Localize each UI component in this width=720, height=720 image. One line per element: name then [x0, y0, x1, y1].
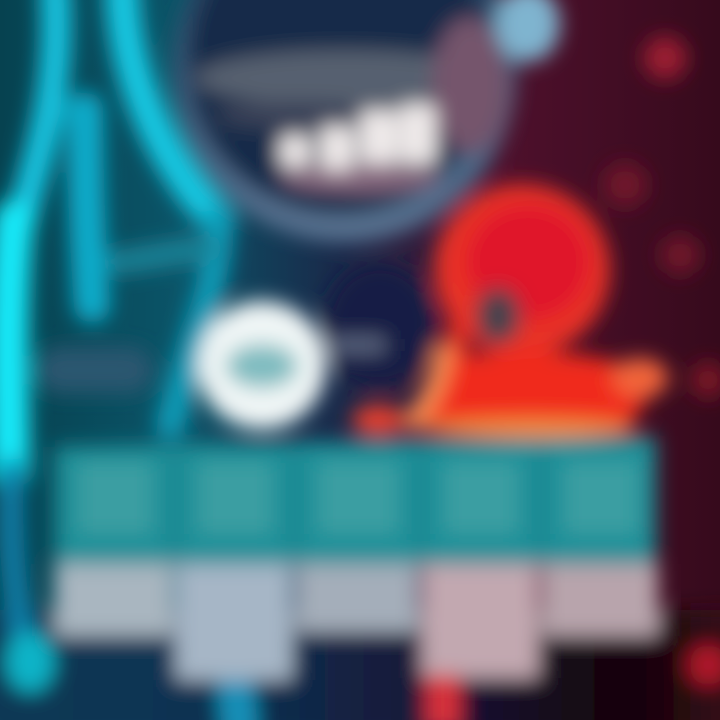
- artery orange highlight left: [410, 345, 445, 425]
- illustration: bottom red strip: [426, 675, 460, 720]
- bottom dark band: [0, 610, 720, 720]
- artery opening: [476, 288, 520, 344]
- illustration: cyan blood vessels: [8, 0, 240, 720]
- gum: [280, 164, 440, 192]
- icon: lower cyan highlight: [6, 632, 54, 692]
- column separators: [172, 438, 543, 564]
- artery stem: [400, 310, 660, 432]
- lips: [432, 17, 508, 153]
- upper palate shadow: [215, 101, 385, 129]
- artery tip: [612, 358, 668, 398]
- cell text shading: [78, 462, 638, 534]
- reflection top right: [496, 0, 560, 62]
- teal panel base: [55, 436, 656, 566]
- illustration: open mouth: [173, 0, 560, 242]
- badge centre: [226, 344, 298, 388]
- artery outer wall: [434, 184, 610, 356]
- lower grey cells: [55, 564, 173, 636]
- callout: white circle badge: [198, 301, 326, 429]
- artery base glow: [425, 418, 635, 438]
- illustration: red particles: [603, 36, 720, 685]
- mouth interior: [188, 0, 492, 214]
- table: five column panel: [55, 436, 658, 680]
- illustration: dark navy area under the mouth: [325, 263, 435, 387]
- mouth outer ring: [173, 0, 517, 242]
- illustration: red artery ring: [352, 184, 668, 438]
- artery inner: [466, 204, 590, 320]
- artery left tip: [352, 405, 404, 435]
- connector from badge: [330, 337, 385, 353]
- teeth: [280, 104, 436, 170]
- upper palate: [195, 50, 495, 106]
